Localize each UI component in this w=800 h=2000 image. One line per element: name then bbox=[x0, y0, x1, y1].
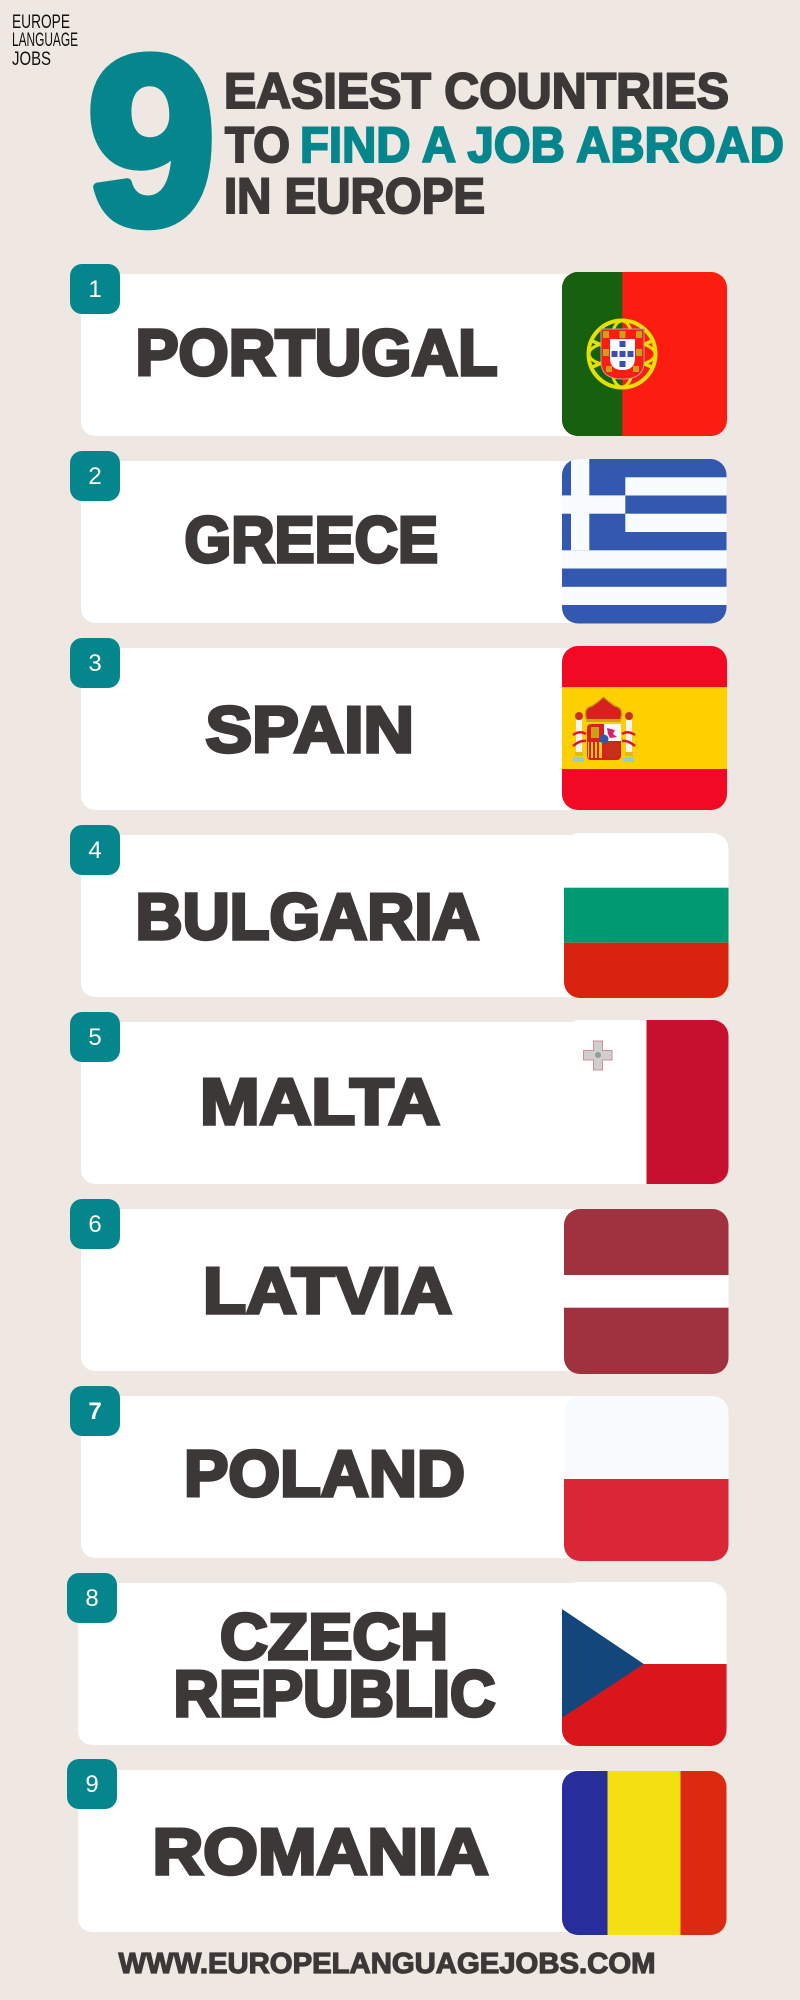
flag: Czech Republic bbox=[562, 1582, 727, 1746]
badge 6 bbox=[70, 1199, 120, 1249]
flag: Spain bbox=[562, 646, 727, 810]
country name: ROMANIA bbox=[152, 1815, 488, 1888]
footer website: WWW.EUROPELANGUAGEJOBS.COM bbox=[118, 1948, 656, 1980]
flag: Latvia bbox=[564, 1209, 729, 1374]
card bbox=[78, 1583, 608, 1745]
panel: Spain bbox=[70, 638, 727, 810]
title: IN EUROPE bbox=[224, 168, 485, 224]
country name bbox=[174, 1600, 496, 1730]
flag: Malta bbox=[564, 1020, 730, 1184]
country name: CZECH bbox=[220, 1600, 448, 1673]
badge 1: 1 bbox=[88, 276, 102, 303]
badge 5 bbox=[70, 1012, 120, 1062]
card bbox=[81, 1022, 611, 1184]
badge 4 bbox=[70, 825, 120, 875]
badge 9 bbox=[67, 1759, 117, 1809]
logo: Europe Language Jobs: JOBS bbox=[12, 49, 51, 70]
badge 2: 2 bbox=[88, 463, 102, 490]
badge 3: 3 bbox=[88, 650, 102, 677]
card bbox=[81, 1396, 611, 1558]
title bbox=[224, 63, 784, 224]
country name: PORTUGAL bbox=[136, 316, 498, 389]
flag: Poland bbox=[564, 1396, 729, 1561]
card bbox=[81, 835, 611, 997]
badge 8: 8 bbox=[85, 1585, 99, 1612]
card bbox=[81, 274, 611, 436]
badge 7 bbox=[70, 1386, 120, 1436]
panel: Greece bbox=[70, 451, 727, 624]
badge 7: 7 bbox=[88, 1398, 102, 1425]
badge 4: 4 bbox=[88, 837, 102, 864]
logo: Europe Language Jobs: EUROPE bbox=[12, 12, 70, 33]
flag: Bulgaria bbox=[564, 833, 729, 999]
country name: SPAIN bbox=[206, 693, 414, 766]
country name: GREECE bbox=[184, 503, 438, 576]
card bbox=[81, 461, 611, 623]
title: EASIEST COUNTRIES bbox=[224, 63, 729, 119]
badge 1 bbox=[70, 264, 120, 314]
badge 2 bbox=[70, 451, 120, 501]
country name: BULGARIA bbox=[136, 880, 480, 953]
panel: Malta bbox=[70, 1012, 730, 1184]
country name: REPUBLIC bbox=[174, 1657, 496, 1730]
title: TO bbox=[225, 117, 290, 173]
panel: Bulgaria bbox=[70, 825, 729, 999]
card bbox=[81, 1209, 611, 1371]
big number nine: 9 bbox=[87, 7, 216, 275]
flag: Greece bbox=[562, 459, 727, 624]
panel: Latvia bbox=[70, 1199, 729, 1374]
badge 6: 6 bbox=[88, 1211, 102, 1238]
badge 8 bbox=[67, 1573, 117, 1623]
card bbox=[81, 648, 611, 810]
title: FIND A JOB ABROAD bbox=[300, 117, 784, 173]
badge 5: 5 bbox=[88, 1024, 102, 1051]
logo: Europe Language Jobs bbox=[12, 12, 78, 70]
country name: POLAND bbox=[184, 1437, 465, 1510]
badge 3 bbox=[70, 638, 120, 688]
logo: Europe Language Jobs: LANGUAGE bbox=[12, 30, 78, 51]
flag: Portugal bbox=[562, 272, 727, 436]
country name: MALTA bbox=[200, 1065, 440, 1138]
panel: Romania bbox=[67, 1759, 728, 1935]
panel: Czech Republic bbox=[67, 1573, 727, 1746]
flag: Romania bbox=[562, 1771, 728, 1935]
badge 9: 9 bbox=[85, 1771, 99, 1798]
country name: LATVIA bbox=[203, 1254, 452, 1327]
panel: Poland bbox=[70, 1386, 729, 1561]
card bbox=[78, 1770, 608, 1932]
panel: Portugal bbox=[70, 264, 727, 436]
